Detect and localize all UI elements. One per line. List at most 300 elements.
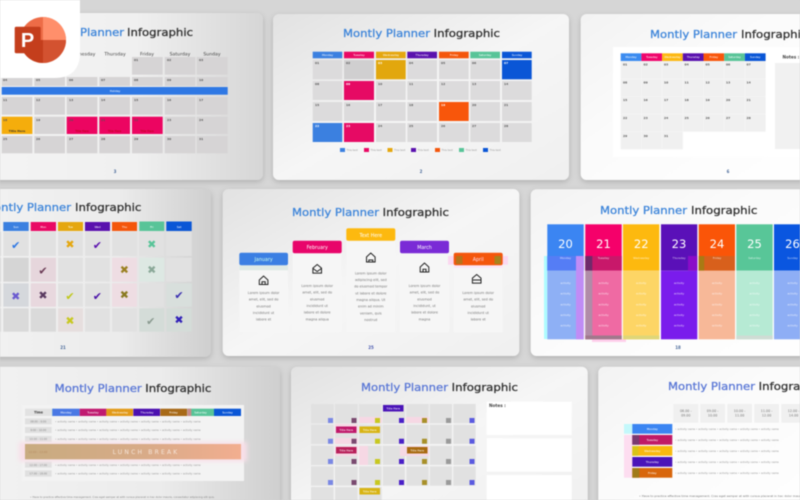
column: 23 Thursday: activity [674, 292, 684, 296]
title: schedule: Infographic [145, 382, 211, 395]
event tags: Title Here [338, 428, 353, 432]
card: April: eiusmod [471, 304, 485, 308]
page number: 25 [368, 345, 374, 350]
date numbers: 02 [167, 58, 171, 62]
card: January: labore et [256, 318, 272, 322]
date numbers: 25 [3, 137, 7, 141]
column: 23 Thursday: Thursday [671, 256, 686, 260]
highlighted days [2, 117, 163, 134]
date numbers: 13 [69, 98, 73, 102]
column: 23 Thursday: activity [674, 302, 684, 306]
column: 26 Sunday: activity [787, 313, 798, 317]
weekday header: Saturday [728, 55, 741, 59]
date numbers: 19 [441, 103, 445, 107]
calendar grid [313, 60, 532, 142]
notes panel [487, 402, 572, 500]
date numbers: 14 [746, 80, 751, 84]
column: 21 Tuesday: Tuesday [597, 256, 610, 260]
icon: house with mail [313, 264, 322, 273]
activity rows: • activity name • activity name • activity name • activity name • activity name • activity name • activity name [55, 463, 201, 467]
icon: house [472, 274, 481, 283]
card: January: Lorem ipsum dolor [248, 291, 280, 295]
page number: 21 [60, 345, 66, 350]
date numbers: 15 [623, 98, 627, 102]
panel: month cards slide 25 [223, 189, 519, 356]
panel: calendar tags with notes slide [291, 367, 588, 500]
date numbers: 11 [684, 80, 689, 84]
weekday labels [69, 52, 221, 58]
check and cross marks: ✖ [120, 263, 129, 276]
date numbers: 10 [664, 80, 668, 84]
tint patches [335, 417, 429, 465]
date numbers: 09 [167, 78, 171, 82]
legend: This text [442, 148, 453, 152]
card: March: March [417, 245, 432, 251]
weekday labels: Friday [140, 52, 154, 58]
column: 21 Tuesday: activity [598, 313, 609, 317]
weekday header: Sat [177, 225, 182, 229]
card: February [293, 241, 342, 332]
check and cross marks: ✔ [146, 315, 155, 328]
holiday bar: Holiday [110, 89, 121, 93]
weekday header [313, 52, 532, 58]
table header: Time [34, 411, 43, 415]
card: January [239, 253, 288, 332]
legend [340, 148, 501, 152]
date numbers: 24 [199, 118, 203, 122]
column: 24 Friday: activity [712, 324, 722, 328]
weekday header: Sunday [512, 53, 523, 57]
title: slide 6: Montly Planner [650, 28, 738, 41]
column: 21 Tuesday: activity [598, 302, 609, 306]
column: 26 Sunday: Sunday [787, 256, 798, 260]
date numbers: 17 [378, 103, 382, 107]
date numbers: 12 [706, 80, 710, 84]
title: slide 18: Infographic [691, 204, 757, 217]
column: 26 Sunday [774, 224, 800, 339]
date numbers: 14 [101, 98, 105, 102]
card: Text Here: adipiscing elit, sed [355, 278, 387, 282]
time column: 17:00 - 18:00 [30, 472, 47, 476]
weekday header: Friday [710, 55, 718, 59]
calendar grid [2, 57, 228, 153]
card: February: labore et dolore [304, 311, 331, 315]
weekday rows: Wednesday [644, 449, 661, 453]
highlighted days: Title Here [74, 129, 89, 133]
title: slide 2 [343, 27, 500, 40]
weekday header: Saturday [479, 53, 492, 57]
date numbers: 13 [472, 82, 476, 86]
date numbers: 21 [101, 118, 105, 122]
date numbers: 19 [706, 98, 710, 102]
check and cross marks: ✖ [38, 289, 48, 302]
card: March: amet, elit, sed do [410, 291, 439, 295]
check and cross marks: ✖ [147, 238, 156, 251]
card: February: eiusmod [310, 297, 324, 301]
date numbers: 15 [134, 98, 138, 102]
date numbers: 22 [134, 118, 138, 122]
date numbers: 24 [664, 116, 668, 120]
column: 23 Thursday: activity [674, 281, 684, 285]
card: January: eiusmod [256, 304, 271, 308]
page number: 6 [727, 169, 730, 174]
date numbers: 31 [664, 134, 668, 138]
title: tags calendar: Montly Planner [361, 381, 449, 394]
weekday rows: Monday [647, 427, 658, 431]
card: April [448, 253, 508, 332]
white table card [613, 47, 800, 157]
date numbers [315, 61, 508, 128]
legend: This text [418, 148, 429, 152]
weekday header: Thursday [414, 53, 429, 57]
calendar grid [311, 404, 476, 500]
table header: Saturday [194, 411, 207, 415]
time header: 11.00 - [761, 409, 773, 413]
column: 20 Monday: activity [560, 302, 571, 306]
table header: Friday [169, 411, 178, 415]
column: 24 Friday: activity [712, 302, 722, 306]
check and cross marks: ✖ [120, 289, 129, 302]
card: Text Here: magna aliqua. Ut [356, 298, 386, 302]
column: 21 Tuesday [585, 224, 622, 339]
column: 24 Friday: 24 [710, 237, 724, 251]
check and cross marks: ✖ [65, 314, 75, 327]
activity rows: • activity name • activity name • activity name • activity name • activity name • activity name • activity name [55, 420, 201, 424]
highlighted days [313, 60, 532, 142]
date numbers: 12 [36, 98, 40, 102]
date numbers: 04 [409, 61, 413, 65]
time header: 14.00 [789, 414, 798, 418]
weekday labels: Sunday [203, 52, 221, 58]
date numbers: 14 [504, 82, 508, 86]
table header: Wednesday [112, 411, 128, 415]
date numbers: 20 [472, 103, 476, 107]
date numbers: 01 [623, 62, 627, 66]
card: Text Here: do eiusmod tempor [354, 285, 388, 289]
lunch break band: LUNCH BREAK [113, 449, 179, 456]
card: March: labore et dolore [411, 311, 438, 315]
date squares [328, 418, 474, 485]
highlighted days: Title Here [107, 129, 122, 133]
weekday header: Thu [121, 225, 127, 229]
time header: 11.00 [735, 414, 744, 418]
column: 23 Thursday: 23 [672, 237, 686, 251]
table cells [0, 232, 192, 332]
weekday header: Monday [322, 53, 333, 57]
date numbers: 27 [69, 137, 73, 141]
lunch break band [19, 442, 247, 462]
date numbers: 20 [726, 98, 730, 102]
title: tags calendar [361, 381, 518, 394]
date numbers: 08 [623, 80, 627, 84]
icon: house [420, 263, 429, 272]
date numbers: 23 [167, 118, 171, 122]
date numbers: 31 [199, 137, 203, 141]
activity rows: • activity name • activity name • activity name • activity name • activity name [675, 449, 779, 453]
legend: This text [346, 148, 358, 152]
time header: 09.00 - [707, 409, 719, 413]
weekday header: Thursday [686, 55, 700, 59]
date numbers: 29 [623, 134, 627, 138]
legend: This text [370, 148, 382, 152]
date numbers: 27 [726, 116, 730, 120]
weekday rows [632, 424, 672, 478]
date numbers: 29 [134, 137, 138, 141]
title: slide 2: Montly Planner [343, 27, 431, 40]
card: January: incididunt ut [253, 311, 275, 315]
weekday header: Tue [67, 225, 73, 229]
date numbers: 26 [36, 137, 40, 141]
column: 25 Saturday: activity [749, 324, 760, 328]
date numbers: 27 [472, 124, 476, 128]
page number: 18 [675, 345, 681, 350]
title: slide 21 [0, 201, 141, 214]
card: Text Here [346, 228, 395, 332]
activity rows: • activity name • activity name • activity name • activity name • activity name [675, 460, 779, 464]
card: Text Here: Lorem ipsum dolor [355, 272, 387, 276]
date numbers: 03 [199, 58, 203, 62]
date numbers: 18 [3, 118, 7, 122]
panel: calendar slide 2 [273, 14, 569, 180]
card: Text Here: ut labore et dolore [355, 291, 387, 295]
column: 23 Thursday [661, 224, 697, 339]
date numbers [623, 62, 751, 138]
check and cross marks: ✖ [65, 238, 75, 251]
column: 25 Saturday: activity [749, 281, 760, 285]
event tags [336, 405, 428, 494]
column: 22 Wednesday: activity [636, 313, 647, 317]
weekday header: Sun [13, 225, 19, 229]
check and cross marks: ✔ [65, 290, 75, 303]
column: 20 Monday: activity [560, 281, 571, 285]
column: 21 Tuesday: activity [598, 324, 609, 328]
holiday bar [2, 87, 228, 95]
check and cross marks: ✔ [93, 239, 102, 252]
weekday header: Friday [450, 53, 459, 57]
date numbers: 08 [134, 78, 138, 82]
card: February: amet, elit, sed do [302, 291, 332, 295]
time column: 9:00 - 10:00 [30, 428, 47, 432]
date numbers: 06 [472, 61, 476, 65]
title: time schedule [668, 380, 800, 393]
date numbers: 21 [504, 103, 508, 107]
date numbers: 30 [167, 137, 171, 141]
date numbers: 28 [746, 116, 751, 120]
date numbers: 25 [409, 124, 413, 128]
date numbers: 30 [644, 134, 648, 138]
title: schedule: Montly Planner [55, 382, 142, 395]
weekday labels: Saturday [170, 52, 191, 58]
card: March: Lorem ipsum dolor [409, 284, 441, 288]
panel: schedule table slide [0, 367, 280, 500]
date numbers: 07 [101, 78, 105, 82]
card: April: incididunt ut [468, 311, 490, 315]
column: 26 Sunday: activity [787, 292, 798, 296]
column: 26 Sunday: 26 [785, 237, 800, 251]
tint strip [624, 424, 632, 478]
date numbers: 24 [378, 124, 382, 128]
date numbers: 13 [726, 80, 730, 84]
event tags: Title Here [338, 448, 353, 452]
table header: Tuesday [86, 411, 99, 415]
column: 26 Sunday: activity [787, 324, 798, 328]
title: slide 6 [650, 28, 800, 41]
date numbers: 16 [346, 103, 350, 107]
page number: 3 [114, 169, 117, 174]
weekday header [3, 222, 192, 231]
column: 20 Monday: 20 [558, 237, 573, 251]
title: slide 3 [80, 26, 193, 39]
weekday rows: Thursday [645, 460, 659, 464]
column: 22 Wednesday: Wednesday [633, 256, 650, 260]
footnote: • Have to practice effective time management. Cras eget semper at with cursus placerat in hac dolor mauris, consectetur adipiscing elit quis. [30, 495, 215, 499]
date numbers: 05 [36, 78, 40, 82]
time column: 10:00 - 11:00 [30, 437, 47, 441]
date numbers: 09 [346, 82, 350, 86]
weekday rows: Tuesday [646, 438, 658, 442]
date numbers [3, 58, 203, 141]
date numbers: 15 [315, 103, 319, 107]
time header: 12.00 - [788, 409, 800, 413]
panel: time schedule slide [598, 367, 800, 500]
date numbers: 17 [664, 98, 668, 102]
date numbers: 02 [346, 61, 350, 65]
time column: 12:00 - 17:00 [30, 463, 47, 467]
date numbers: 06 [726, 62, 730, 66]
time header: 08.00 - [680, 409, 692, 413]
card: February: February [307, 245, 328, 251]
date numbers: 16 [644, 98, 648, 102]
date numbers: 18 [409, 103, 413, 107]
weekday header: Tuesday [645, 55, 658, 59]
icon: house [259, 276, 268, 284]
date numbers: 11 [409, 82, 413, 86]
time header: 09.00 [681, 414, 691, 418]
time header: 10.00 [708, 414, 717, 418]
date numbers: 08 [315, 82, 319, 86]
card: April: Lorem ipsum dolor [462, 291, 495, 295]
weekday header [621, 53, 766, 61]
panel: calendar with notes slide 6 [581, 14, 800, 180]
time column [25, 418, 52, 477]
column: 22 Wednesday [623, 224, 659, 339]
column: 20 Monday [547, 224, 584, 339]
column: 25 Saturday: activity [749, 313, 760, 317]
date numbers: 07 [746, 62, 751, 66]
date numbers: 03 [664, 62, 668, 66]
column: 20 Monday: Monday [560, 256, 571, 260]
date numbers: 16 [167, 98, 171, 102]
column: 25 Saturday: 25 [747, 237, 762, 251]
card: March: eiusmod [417, 297, 432, 301]
weekday header: Mon [40, 225, 46, 229]
date numbers: 07 [504, 61, 508, 65]
time header: 12.00 [762, 414, 771, 418]
date numbers: 22 [623, 116, 627, 120]
title: slide 21: Infographic [75, 201, 141, 214]
column: 24 Friday [699, 224, 735, 339]
time header: 10.00 - [734, 409, 746, 413]
title: slide 3: Planner [80, 26, 124, 39]
date numbers: 09 [644, 80, 648, 84]
date numbers: 28 [101, 137, 105, 141]
column: 20 Monday: activity [560, 313, 571, 317]
date numbers: 23 [644, 116, 648, 120]
weekday header: Wednesday [664, 55, 681, 59]
weekday header: Monday [625, 55, 637, 59]
date numbers: 26 [441, 124, 445, 128]
column: 25 Saturday: Saturday [748, 256, 761, 260]
column: 20 Monday: activity [560, 324, 571, 328]
card: April: April [473, 257, 484, 263]
legend: This text [490, 148, 501, 152]
column: 24 Friday: activity [712, 281, 722, 285]
highlighted days: Title Here [139, 129, 154, 133]
activity rows: • activity name • activity name • activity name • activity name • activity name • activity name • activity name [55, 472, 201, 476]
weekday labels: Wednesday [69, 52, 96, 58]
title: slide 2: Infographic [434, 27, 500, 40]
column: 22 Wednesday: activity [636, 324, 647, 328]
card: February: magna aliqua [306, 317, 329, 321]
table header [25, 409, 241, 416]
date numbers: 10 [378, 82, 382, 86]
icon: PowerPoint: P [21, 30, 34, 52]
card: February: Lorem ipsum dolor [301, 284, 334, 288]
column: 22 Wednesday: 22 [634, 237, 649, 251]
date numbers: 10 [199, 78, 203, 82]
check and cross marks [11, 238, 184, 328]
date numbers: 01 [315, 61, 319, 65]
activity rows: • activity name • activity name • activity name • activity name • activity name [675, 427, 779, 431]
legend: This text [466, 148, 477, 152]
column: 26 Sunday: activity [787, 281, 798, 285]
event tags: Title Here [362, 428, 377, 432]
date numbers: 28 [504, 124, 508, 128]
check and cross marks: ✔ [174, 289, 184, 302]
date numbers: 04 [3, 78, 7, 82]
card: April: amet, elit, sed do [463, 298, 493, 302]
title: time schedule: Montly Planner [668, 380, 756, 393]
lunch break band: 12:00 - 13:00 [29, 450, 48, 454]
card: April: labore et [471, 318, 486, 322]
column: 22 Wednesday: activity [636, 302, 647, 306]
card: Text Here: nostrud [364, 318, 377, 322]
date numbers: 21 [746, 98, 751, 102]
weekday header: Wed [94, 225, 101, 229]
calendar grid [621, 61, 766, 149]
notes block [775, 54, 800, 149]
event tags: Title Here [385, 406, 400, 410]
panel: weekday columns slide 18 [531, 189, 800, 356]
card: March [400, 241, 449, 332]
date numbers: 18 [684, 98, 689, 102]
title: tags calendar: Infographic [452, 381, 518, 394]
column: 23 Thursday: activity [674, 313, 684, 317]
card: Text Here: veniam, quis [360, 311, 382, 315]
table header: Sunday [222, 411, 233, 415]
date numbers: 25 [684, 116, 689, 120]
date numbers: 20 [69, 118, 73, 122]
column: 25 Saturday [736, 224, 773, 339]
date numbers: 01 [134, 58, 138, 62]
weekday header: Wednesday [383, 53, 399, 57]
date numbers: 06 [69, 78, 73, 82]
time column: 08:00 - 9:00 [30, 420, 47, 424]
date numbers: 17 [199, 98, 203, 102]
column: 21 Tuesday: activity [598, 292, 609, 296]
column: 26 Sunday: activity [787, 302, 798, 306]
icon: house [366, 253, 375, 262]
